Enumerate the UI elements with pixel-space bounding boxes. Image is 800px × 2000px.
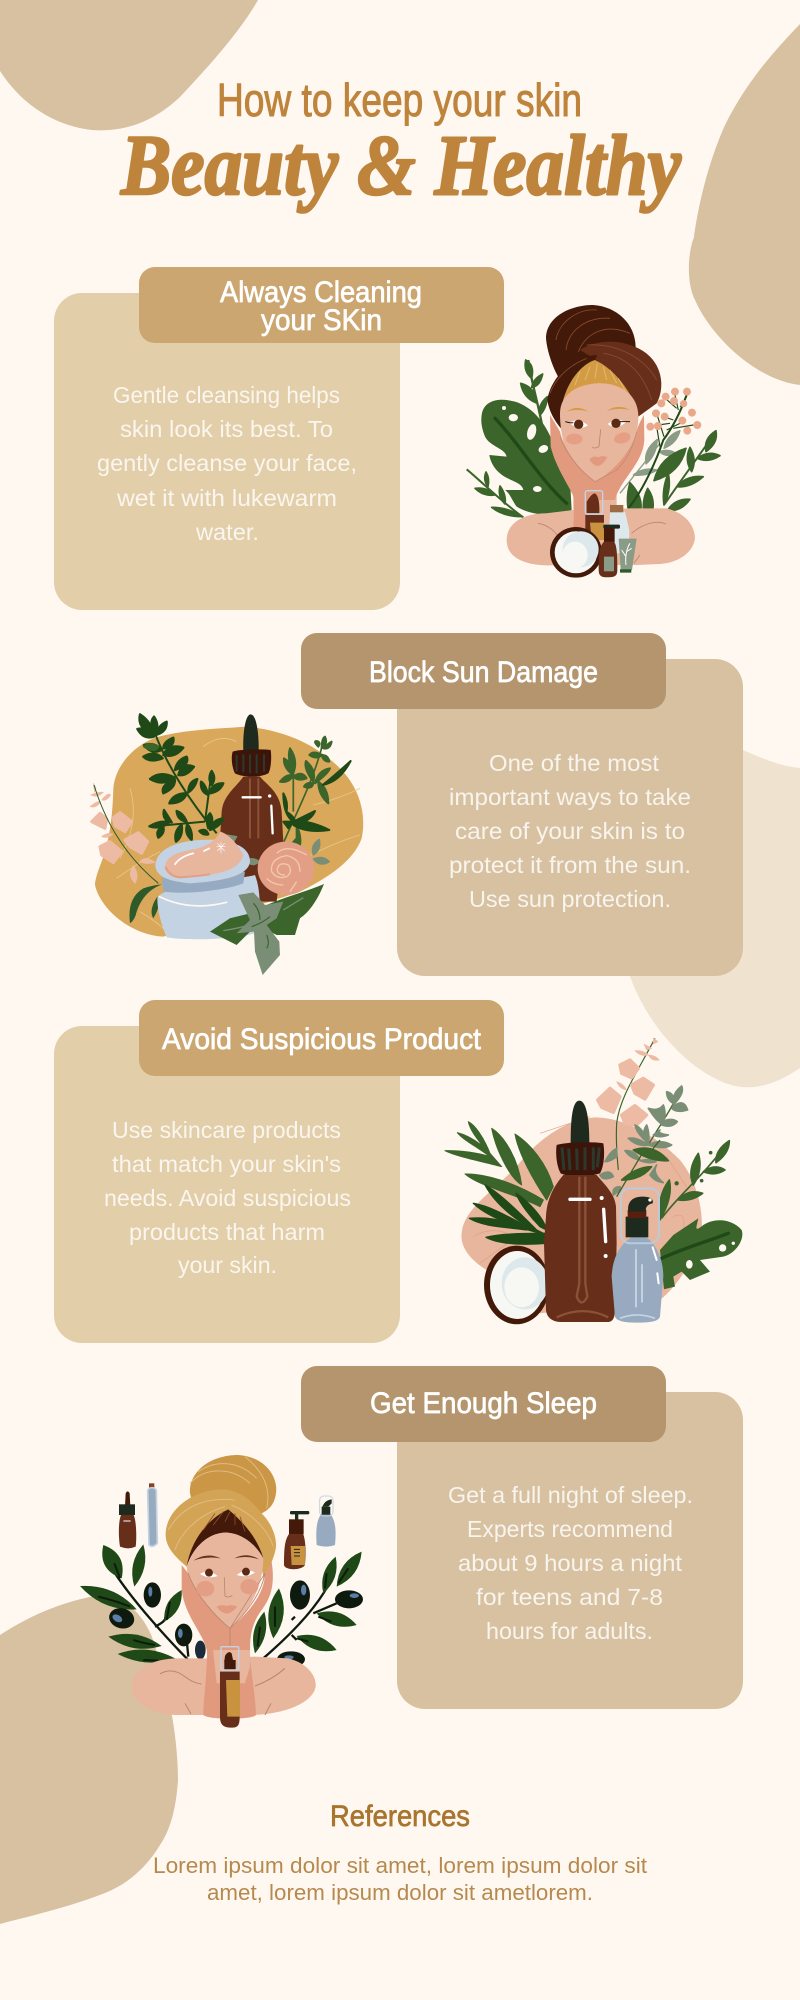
panel body: [397, 1392, 743, 1709]
heading text: Avoid Suspicious Product: [162, 1023, 482, 1056]
panel heading bar: [139, 267, 504, 343]
panel body: [397, 659, 743, 976]
body text: One of the most: [489, 750, 660, 776]
body text: [97, 382, 357, 545]
body text: about 9 hours a night: [458, 1550, 683, 1576]
body text: care of your skin is to: [455, 818, 685, 844]
body text: wet it with lukewarm: [116, 485, 337, 511]
body text: Experts recommend: [467, 1516, 673, 1542]
body text: skin look its best. To: [120, 416, 333, 442]
references text: [153, 1853, 647, 1905]
body text: [449, 750, 691, 912]
body text: Get a full night of sleep.: [448, 1482, 693, 1508]
body text: your skin.: [178, 1252, 277, 1278]
illustration: woman with towel, olive branches and bottles: [80, 1455, 363, 1728]
illustration: serum bottle, cream jar, stone and herbs: [90, 714, 363, 975]
illustration: dropper bottle, pump bottle, coconut and plants: [445, 1038, 742, 1324]
body text: for teens and 7-8: [476, 1584, 663, 1610]
body text: protect it from the sun.: [449, 852, 691, 878]
background blob: middle right: [625, 735, 800, 1087]
body text: gently cleanse your face,: [97, 450, 357, 476]
body text: Gentle cleansing helps: [113, 382, 340, 408]
illustration: woman with hair bun and skincare products: [467, 305, 720, 578]
heading text: your SKin: [261, 304, 382, 337]
body text: [104, 1117, 351, 1278]
panel heading bar: [139, 1000, 504, 1076]
references: [153, 1800, 647, 1905]
title line: How to keep your skin: How to keep your skin: [217, 74, 582, 126]
panel heading bar: [301, 1366, 666, 1442]
panel: block sun damage: [301, 633, 743, 976]
panel heading bar: [301, 633, 666, 709]
body text: important ways to take: [449, 784, 691, 810]
panel body: [54, 293, 400, 610]
body text: [448, 1482, 693, 1644]
heading text: Get Enough Sleep: [370, 1387, 597, 1420]
body text: water.: [195, 519, 259, 545]
body text: products that harm: [129, 1219, 325, 1245]
references heading: References: [330, 1800, 470, 1833]
background blob: top right: [689, 24, 800, 385]
panel: get enough sleep: [301, 1366, 743, 1709]
body text: Use skincare products: [112, 1117, 341, 1143]
panel body: [54, 1026, 400, 1343]
panel: avoid suspicious product: [54, 1000, 504, 1343]
title: [120, 74, 682, 213]
background blob: bottom left: [0, 1595, 178, 1924]
panel: always cleaning your skin: [54, 267, 504, 610]
heading text: Block Sun Damage: [369, 656, 598, 689]
heading text: Always Cleaning: [220, 276, 422, 309]
body text: Use sun protection.: [469, 886, 671, 912]
body text: that match your skin's: [112, 1151, 341, 1177]
body text: needs. Avoid suspicious: [104, 1185, 351, 1211]
heading text: [220, 276, 422, 337]
title line: Beauty & Healthy: Beauty & Healthy: [120, 117, 682, 213]
references text: Lorem ipsum dolor sit amet, lorem ipsum dolor sit: [153, 1853, 647, 1878]
body text: hours for adults.: [486, 1618, 653, 1644]
references text: amet, lorem ipsum dolor sit ametlorem.: [207, 1880, 593, 1905]
background blob: top left: [0, 0, 258, 130]
